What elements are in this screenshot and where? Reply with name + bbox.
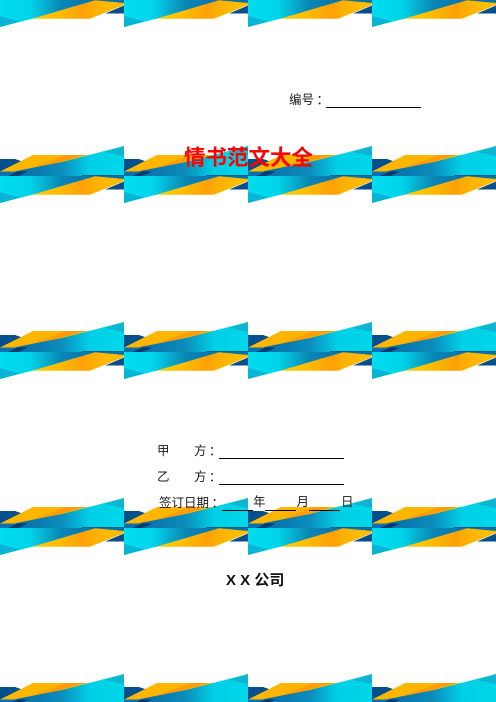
year line (222, 510, 253, 511)
party A line (219, 458, 344, 459)
year: 年 (253, 495, 266, 509)
party B line (219, 484, 344, 485)
title: 情书范文大全 (184, 146, 313, 170)
day: 日 (341, 495, 354, 509)
month line (265, 510, 296, 511)
company name: X X 公司 (226, 572, 284, 589)
party B label: 乙 方： (157, 466, 222, 485)
day line (309, 510, 340, 511)
serial number line (326, 107, 421, 108)
signing date label: 签订日期： (159, 492, 224, 511)
month: 月 (296, 495, 309, 509)
party A label: 甲 方： (157, 440, 222, 459)
serial number label: 编号： (289, 89, 329, 108)
